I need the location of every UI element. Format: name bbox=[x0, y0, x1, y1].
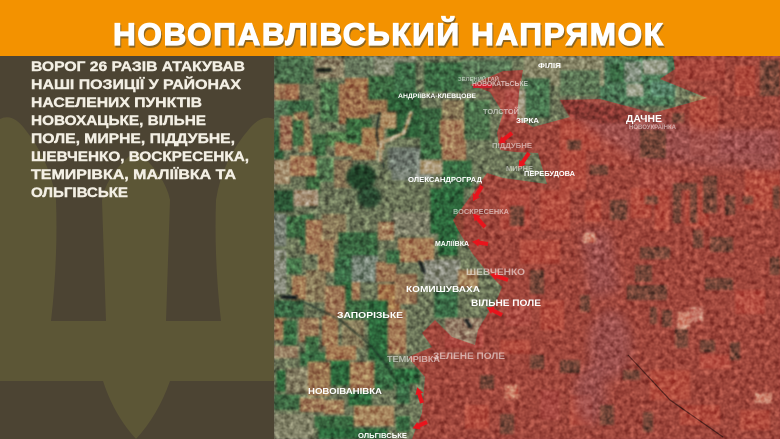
label: Воскресенка: ВОСКРЕСЕНКА bbox=[453, 207, 510, 216]
east river bbox=[628, 355, 723, 437]
label: Зелене Поле: ЗЕЛЕНЕ ПОЛЕ bbox=[433, 351, 505, 361]
east fields under red overlay bbox=[560, 120, 600, 150]
arrow: Зелений Гай bbox=[473, 84, 492, 88]
title: НОВОПАВЛІВСЬКИЙ НАПРЯМОК bbox=[113, 16, 664, 52]
arrow: Піддубне bbox=[503, 133, 512, 140]
dark rivers and ponds bbox=[282, 70, 470, 372]
text block: attacks summary: НАШІ ПОЗИЦІЇ У РАЙОНАХ bbox=[31, 77, 241, 92]
label: Комишуваха: КОМИШУВАХА bbox=[406, 284, 480, 294]
arrow: Мирне bbox=[522, 153, 529, 163]
text block: attacks summary: ОЛЬГІВСЬКЕ bbox=[31, 185, 128, 200]
map labels bbox=[308, 63, 677, 439]
label: Толстой: ТОЛСТОЙ bbox=[483, 107, 519, 116]
label: Запорізьке: ЗАПОРІЗЬКЕ bbox=[337, 310, 403, 320]
text block: attacks summary bbox=[31, 59, 249, 200]
label: Новокатьське: НОВОКАТЬСЬКЕ bbox=[472, 81, 528, 88]
arrow: Воскресенка north bbox=[476, 186, 482, 196]
muted mauve terrain inside red zone bbox=[560, 100, 780, 425]
label: Мирне: МИРНЕ bbox=[506, 164, 533, 173]
green NE sector bbox=[600, 56, 675, 106]
label: Філія: ФІЛІЯ bbox=[538, 63, 561, 70]
label: Темирівка: ТЕМИРІВКА bbox=[387, 354, 440, 364]
arrow: Ольгівське bbox=[418, 422, 427, 426]
red occupied zone overlay bbox=[408, 56, 780, 439]
header bar bbox=[0, 0, 780, 56]
arrow: Шевченко bbox=[496, 276, 508, 280]
label: Андріївка-Клевцове: АНДРІЇВКА-КЛЕВЦОВЕ bbox=[398, 92, 476, 100]
label: Шевченко: ШЕВЧЕНКО bbox=[466, 267, 525, 277]
arrow: Вільне Поле bbox=[492, 310, 502, 315]
label: Новоіванівка: НОВОІВАНІВКА bbox=[308, 387, 382, 396]
title: НОВОПАВЛІВСЬКИЙ НАПРЯМОК bbox=[114, 18, 665, 54]
satellite grain texture bbox=[274, 56, 780, 439]
label: Піддубне: ПІДДУБНЕ bbox=[492, 141, 532, 150]
left panel background with trident emblem bbox=[0, 56, 274, 439]
label: Вільне Поле: ВІЛЬНЕ ПОЛЕ bbox=[471, 298, 541, 308]
text block: attacks summary: ШЕВЧЕНКО, ВОСКРЕСЕНКА, bbox=[31, 149, 249, 164]
map terrain fields bbox=[274, 56, 780, 439]
text block: attacks summary: НАСЕЛЕНИХ ПУНКТІВ bbox=[31, 95, 202, 110]
label: Новоукраїнка: НОВОУКРАЇНКА bbox=[629, 124, 677, 131]
front line arrows bbox=[418, 86, 529, 426]
text block: attacks summary: ВОРОГ 26 РАЗІВ АТАКУВАВ bbox=[31, 59, 245, 74]
arrow: Воскресенка south bbox=[477, 218, 485, 227]
label: Дачне: ДАЧНЕ bbox=[626, 113, 662, 125]
text block: attacks summary: ПОЛЕ, МИРНЕ, ПІДДУБНЕ, bbox=[31, 131, 235, 146]
label: Зірка: ЗІРКА bbox=[516, 116, 540, 125]
text block: attacks summary: ТЕМИРІВКА, МАЛІЇВКА ТА bbox=[31, 167, 236, 182]
label: Зелений Гай: ЗЕЛЕНИЙ ГАЙ bbox=[458, 75, 499, 83]
dark field patches inside red zone bbox=[480, 60, 780, 434]
text block: attacks summary: НОВОХАЦЬКЕ, ВІЛЬНЕ bbox=[31, 113, 206, 128]
arrow: Маліївка bbox=[478, 242, 488, 244]
arrow: Темирівка bbox=[419, 393, 422, 403]
label: Маліївка: МАЛІЇВКА bbox=[435, 240, 469, 248]
satellite map bbox=[274, 56, 780, 439]
icon: dark forest patches bbox=[346, 148, 418, 208]
label: Перебудова: ПЕРЕБУДОВА bbox=[524, 169, 576, 178]
label: Олександроград: ОЛЕКСАНДРОГРАД bbox=[408, 175, 483, 184]
